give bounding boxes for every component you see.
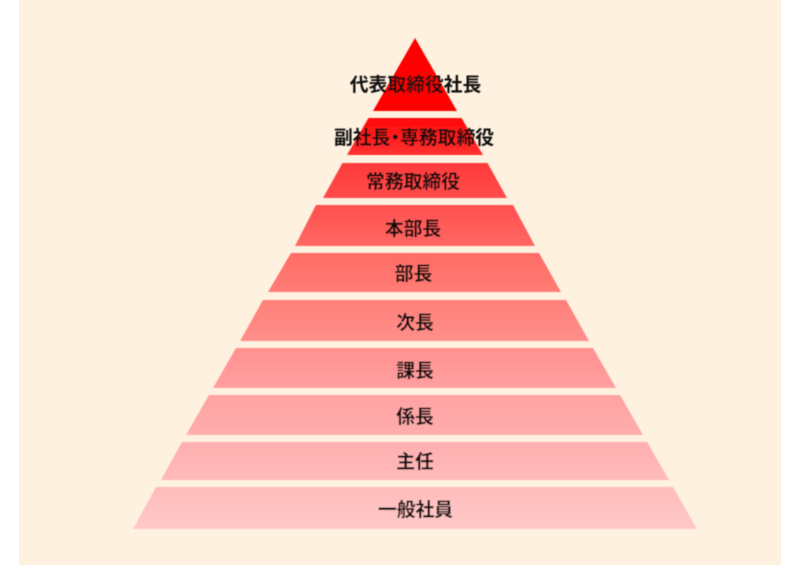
level 7: 課長 (213, 348, 616, 388)
level 2: 副社長・専務取締役 (334, 118, 494, 155)
level 6: 次長 (240, 300, 589, 341)
level 1: 代表取締役社長: 代表取締役社長 (350, 74, 481, 95)
level 10: 一般社員 (133, 487, 697, 529)
level 5: 部長 (268, 253, 561, 292)
level 8: 係長 (186, 395, 643, 435)
level 9: 主任: 主任 (396, 451, 434, 472)
level 3: 常務取締役 (323, 163, 507, 198)
level 7: 課長: 課長 (396, 360, 434, 381)
level 3: 常務取締役: 常務取締役 (366, 171, 460, 192)
level 2: 副社長・専務取締役: 副社長・専務取締役 (334, 127, 494, 148)
level 9: 主任 (161, 442, 669, 480)
level 5: 部長: 部長 (395, 263, 432, 284)
level 10: 一般社員: 一般社員 (378, 499, 453, 520)
level 4: 本部長: 本部長 (385, 218, 441, 239)
level 4: 本部長 (295, 205, 535, 246)
pyramid (133, 38, 697, 529)
level 1: 代表取締役社長 (350, 38, 481, 111)
level 8: 係長: 係長 (396, 406, 434, 427)
level 6: 次長: 次長 (396, 312, 434, 333)
